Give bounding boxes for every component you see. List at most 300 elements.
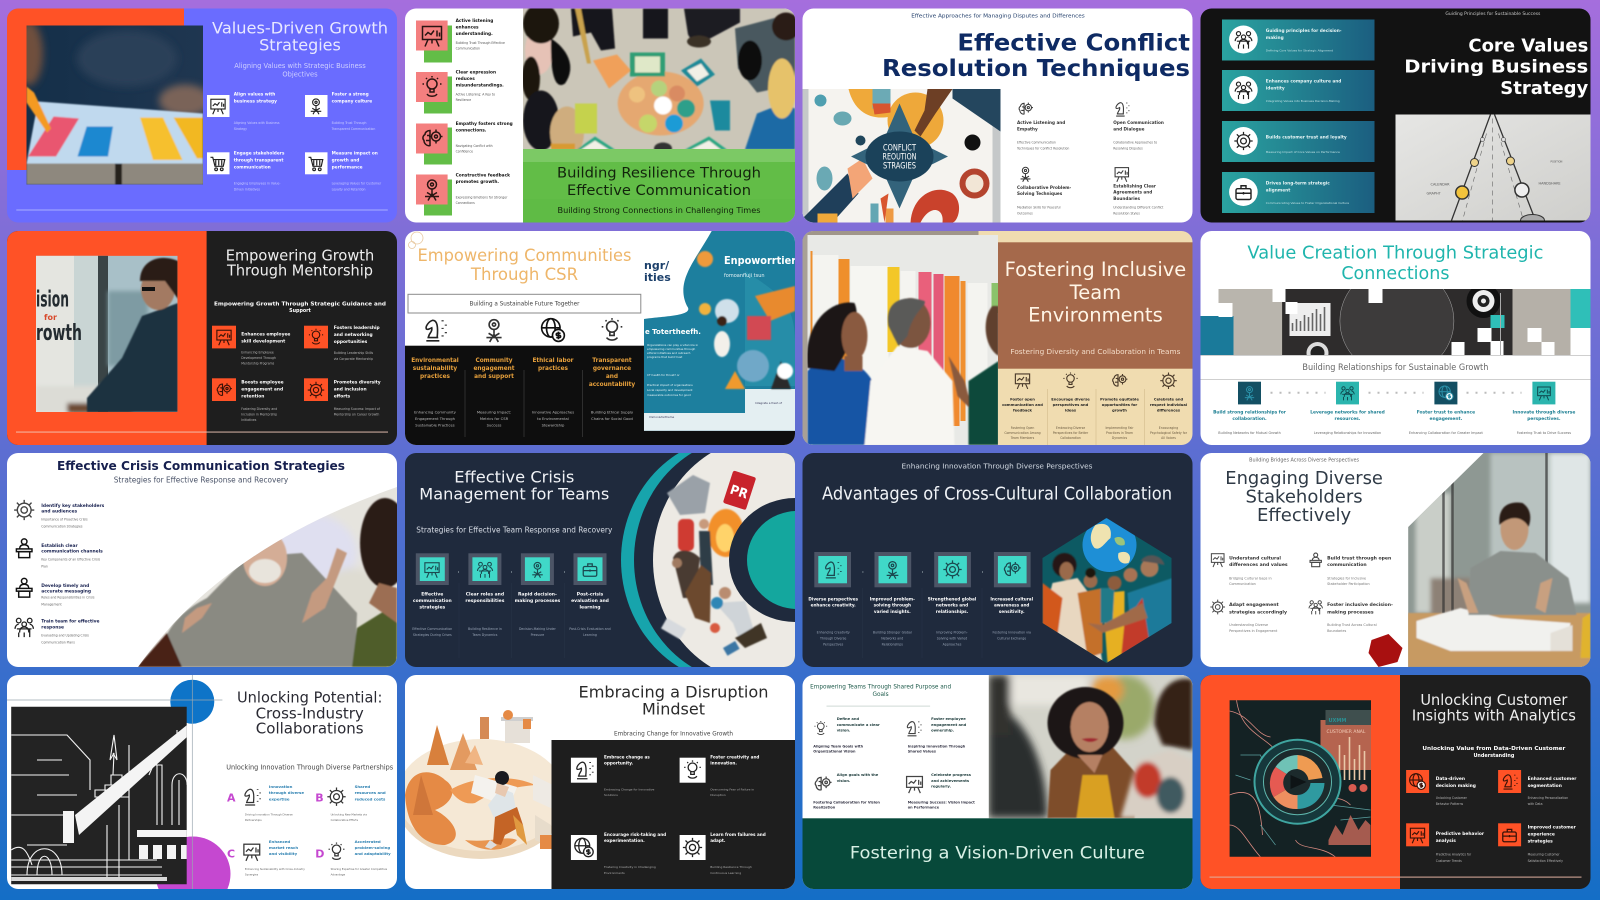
title: Through Mentorship <box>226 262 373 280</box>
column: community: and support <box>474 374 514 380</box>
column: individual differences: Encouraging <box>1159 426 1178 430</box>
column: open communication: feedback <box>1013 408 1033 412</box>
column: community: engagement <box>473 366 515 372</box>
item: foster culture: Transparent Communication <box>331 127 375 131</box>
item D: Accelerated <box>355 839 381 844</box>
column: ethical labor <box>532 358 574 428</box>
poster lettering <box>644 259 671 284</box>
column: open communication <box>1002 374 1043 440</box>
item: clear expression: Active Listening: A Key to <box>456 92 495 96</box>
panel: Effective Crisis Management for Teams <box>405 437 881 683</box>
column: ethical labor: Ethical labor <box>532 358 574 364</box>
title: Driving Business <box>1404 56 1588 78</box>
item: active listening <box>416 18 505 62</box>
item: strong relationships: Build strong relationships for <box>1213 409 1287 415</box>
item: celebrate progress: and achievements <box>931 779 970 783</box>
item: embrace change <box>571 754 654 797</box>
item: messaging: Management <box>41 603 62 607</box>
item: collaborative problem solving: Mediation Skills for Peaceful <box>1017 206 1061 210</box>
title <box>1225 468 1383 526</box>
item: align values: Strategy <box>234 127 247 131</box>
image band <box>1200 289 1590 355</box>
item: diversity: Promotes diversity <box>334 380 381 386</box>
title: Through CSR <box>470 265 578 284</box>
card: company culture: Enhances company culture and <box>1266 79 1341 85</box>
column: environmental: sustainability <box>413 366 457 372</box>
title: Cross-Industry <box>256 704 364 722</box>
item: train team: Communication Plans <box>41 640 75 644</box>
panel: Unlocking Customer Insights with Analytics <box>1200 675 1590 889</box>
illustration caption: CONFLICT <box>883 144 916 154</box>
illustration caption: REOUTION <box>882 152 916 162</box>
poster image: fomoanfluji tsun <box>724 273 765 279</box>
column: individual differences: Celebrate and <box>1154 398 1183 402</box>
item: clear expression <box>416 70 504 114</box>
item: build trust: Build trust through open <box>1327 555 1391 561</box>
item A: A <box>227 792 236 805</box>
connector dots <box>1270 392 1522 394</box>
road labels: HANDSHAKE <box>1538 182 1561 186</box>
item: open communication: Collaborative Approaches to <box>1113 140 1157 144</box>
column: governance: Transparent <box>592 358 632 364</box>
item: adapt strategies <box>1210 600 1287 633</box>
item D: problem-solving <box>355 845 390 850</box>
green title band <box>523 149 795 223</box>
item: empathy: Empathy fosters strong <box>456 121 513 127</box>
poster image: empowering communities through <box>647 347 695 351</box>
item: align values: business strategy <box>234 98 277 104</box>
item B <box>315 784 386 822</box>
title: Insights with Analytics <box>1412 706 1576 724</box>
poster lettering: ities <box>644 271 671 284</box>
title: Unlocking Customer <box>1420 691 1568 709</box>
column: individual differences <box>1150 372 1188 440</box>
item: celebrate progress: Celebrate progress <box>931 773 972 777</box>
item: problem solving: Building Stronger Global <box>873 630 912 634</box>
item: clear agreements: Establishing Clear <box>1113 184 1157 188</box>
item: cultural awareness: Fostering Innovation via <box>992 630 1031 634</box>
title: Advantages of Cross-Cultural Collaboration <box>822 484 1172 504</box>
card: guiding principles: Guiding principles for decision- <box>1266 28 1342 34</box>
item: inclusive decisions <box>1309 601 1393 633</box>
column: governance: and <box>606 374 618 380</box>
item: segmentation <box>1498 770 1577 806</box>
item: channels: Establish clear <box>41 543 78 549</box>
title <box>226 249 373 278</box>
item: communicate vision: Organizational Vision <box>813 750 856 754</box>
item: channels: Plan <box>41 565 48 569</box>
column: diverse perspectives: Perspectives for Better <box>1053 431 1089 435</box>
title band <box>802 818 1192 889</box>
item: diversity: Mentorship on Career Growth <box>334 412 379 416</box>
item: engage stakeholders: Engaging Employees in Value- <box>234 181 281 185</box>
item: clear expression: Clear expression <box>456 70 496 76</box>
column: diverse perspectives: Collaboration <box>1060 436 1081 440</box>
item: innovate: perspectives. <box>1527 416 1561 422</box>
item C: C <box>227 847 235 860</box>
item C: and visibility <box>269 851 298 856</box>
item: measure impact: Loyalty and Retention <box>332 187 366 191</box>
item: segmentation: segmentation <box>1528 783 1562 789</box>
poster image <box>644 231 795 431</box>
item: clear agreements: Resolution Styles <box>1113 212 1140 216</box>
item: predictive: Customer Trends <box>1436 859 1462 863</box>
item: risk taking: experimentation. <box>604 838 645 843</box>
item: inclusive decisions: making processes <box>1327 609 1374 615</box>
illustration: analytics dial <box>1230 700 1371 857</box>
title <box>212 22 387 54</box>
card: company culture <box>1222 70 1374 111</box>
panel: Core Values Driving Business Strategy <box>1200 8 1590 222</box>
panel: Advantages of Cross-Cultural Collaboration <box>802 453 1192 668</box>
poster image: e Totertheefh. <box>645 328 701 336</box>
item: empathy: Confidence <box>456 150 473 154</box>
item: active listening: Active Listening and <box>1017 120 1065 125</box>
item: communication strategies: communication <box>413 598 452 604</box>
item A: Partnerships <box>245 818 262 822</box>
item: decision making: Decision-Making Under <box>519 627 557 631</box>
item: open communication: Open Communication <box>1113 120 1164 125</box>
item: foster trust: Foster trust to enhance <box>1417 409 1475 415</box>
column: governance: Chains for Social Good <box>591 417 633 421</box>
poster image: Practical impact of organisations <box>647 383 693 387</box>
item: align values: Align values with <box>234 92 275 98</box>
title <box>1404 36 1589 99</box>
item: segmentation: with Data <box>1528 802 1543 806</box>
item A: Innovation <box>269 784 293 789</box>
column: equitable opportunities: Dynamics <box>1112 436 1128 440</box>
subtitle <box>214 302 386 313</box>
item: cultural awareness: Increased cultural <box>990 596 1034 601</box>
illustration caption: STRAGIES <box>883 162 916 172</box>
item: embrace change: Embrace change as <box>604 754 650 759</box>
column: open communication: Foster open <box>1010 398 1035 402</box>
column: equitable opportunities: Implementing Fair <box>1105 426 1134 430</box>
illustration: strategic road <box>1396 114 1590 220</box>
item: decision making <box>515 553 561 637</box>
item: foster creativity: innovation. <box>710 760 737 765</box>
item: skill development: Enhances employee <box>241 332 290 338</box>
item: leverage networks: Leveraging Relationships for Innovation <box>1314 431 1381 435</box>
item D: D <box>315 847 324 860</box>
title: Strategies <box>259 36 341 54</box>
item: empathy <box>416 121 513 164</box>
photo: colleagues at wall of notes <box>808 235 998 445</box>
item D: Sharing Expertise for Greater Competitive <box>331 867 388 871</box>
item: embrace change: Solutions <box>604 793 618 797</box>
item: risk taking: Encourage risk-taking and <box>604 832 666 837</box>
column: environmental: Engagement Through <box>415 417 456 421</box>
item: engage stakeholders: Driven Initiatives <box>234 187 260 191</box>
item: creativity: Enhancing Creativity <box>817 630 850 634</box>
item C: Enhanced <box>269 839 290 844</box>
item: feedback: promotes growth. <box>456 179 499 185</box>
item: communication strategies <box>412 553 452 637</box>
item: roles: responsibilities <box>465 598 505 604</box>
title: Management for Teams <box>419 484 609 503</box>
item: strong relationships: Building Networks for Mutual Growth <box>1218 431 1281 435</box>
item: innovate: Innovate through diverse <box>1512 409 1575 415</box>
subtitle: Guiding Principles for Sustainable Success <box>1445 11 1541 17</box>
item: problem solving <box>870 552 915 646</box>
window lettering: for <box>44 313 57 322</box>
subtitle: Strategies for Effective Response and Recovery <box>114 476 289 485</box>
item: communicate vision: vision. <box>837 729 851 733</box>
subtitle: Enhancing Innovation Through Diverse Perspectives <box>902 462 1093 471</box>
item: strong relationships <box>1213 382 1287 435</box>
column: diverse perspectives: ideas <box>1065 408 1077 412</box>
column: equitable opportunities: Promote equitable <box>1100 398 1139 402</box>
item A: expertise <box>269 796 290 801</box>
subtitle: Goals <box>872 692 889 698</box>
subtitle: Building Bridges Across Diverse Perspectives <box>1249 457 1360 463</box>
item: stakeholders: Identify key stakeholders <box>41 503 105 509</box>
item C: Synergies <box>245 872 259 876</box>
column: environmental: Environmental <box>411 358 459 364</box>
title: Effective Conflict <box>957 30 1190 56</box>
subtitle box <box>408 294 641 313</box>
item A: Driving Innovation Through Diverse <box>245 813 293 817</box>
item: predictive: Predictive Analytics for <box>1436 853 1472 857</box>
title <box>1247 243 1543 284</box>
dial label: UXMM <box>1328 718 1346 724</box>
item: foster trust: Enhancing Collaboration for Greater Impact <box>1409 431 1484 435</box>
item: predictive: Predictive behavior <box>1436 831 1485 837</box>
item: align goals: Fostering Collaboration for Vision <box>813 800 880 804</box>
item: train team: Evaluating and Updating Crisis <box>41 633 89 637</box>
item: engagement: Boosts employee <box>241 380 284 386</box>
item: train team: Train team for effective <box>41 619 99 625</box>
panel: Engaging Diverse Stakeholders Effectively <box>1200 453 1590 667</box>
card: long-term alignment <box>1222 172 1374 213</box>
item: open communication <box>1113 103 1164 150</box>
item A <box>227 784 304 822</box>
item: data-driven: Unlocking Customer <box>1436 796 1468 800</box>
item: channels <box>16 539 103 569</box>
item: engagement: Fostering Diversity and <box>241 407 277 411</box>
column: open communication: Team Members <box>1010 436 1035 440</box>
subtitle <box>234 62 366 78</box>
item: collaborative problem solving <box>1017 167 1072 216</box>
item: inclusive decisions: Building Trust Across Cultural <box>1327 623 1377 627</box>
item: decision making: making processes <box>515 598 561 604</box>
item: communicate vision: Define and <box>837 717 860 721</box>
item: active listening: Communication <box>456 46 480 50</box>
item: inclusive decisions: Boundaries <box>1327 629 1346 633</box>
item C: market reach <box>269 845 298 850</box>
item: learn from failure: Building Resilience Through <box>710 865 752 869</box>
item: train team <box>15 618 99 644</box>
item: engage stakeholders: through transparent <box>234 157 283 163</box>
title: Building Resilience Through <box>557 166 761 182</box>
column: ethical labor: practices <box>538 366 569 372</box>
item B: B <box>315 792 324 805</box>
title: Effectively <box>1257 505 1352 526</box>
item: innovate: Fostering Trust to Drive Success <box>1517 431 1571 435</box>
road labels: POSITION <box>1550 160 1563 164</box>
item: messaging: Develop timely and <box>41 583 89 589</box>
title: Strategy <box>1500 78 1589 99</box>
item: active listening: Building Trust Through Effective <box>456 41 505 45</box>
dark content panel <box>552 740 795 889</box>
item: employee engagement <box>907 717 967 754</box>
item: build trust <box>1310 553 1391 586</box>
subtitle box: Building a Sustainable Future Together <box>470 300 580 307</box>
title <box>558 166 760 195</box>
subtitle: Building Strong Connections in Challenging Times <box>558 206 761 215</box>
item: communication strategies: Effective Communication <box>412 627 452 631</box>
item: problem solving: Networks and <box>881 636 903 640</box>
item: align goals: vision. <box>837 779 851 783</box>
item: build trust: communication <box>1327 562 1367 568</box>
item: align values: Aligning Values with Business <box>234 121 280 125</box>
item: leadership: Fosters leadership <box>334 325 380 331</box>
item: diversity <box>304 378 381 416</box>
subtitle: Strategies for Effective Team Response and Recovery <box>416 526 613 535</box>
column: community: Success <box>487 424 502 428</box>
card: customer trust: Measuring Impact of Core Values on Performance <box>1266 150 1340 154</box>
item: communicate vision: Aligning Team Goals with <box>813 744 864 748</box>
item: leadership <box>304 325 380 361</box>
item: segmentation: Enhanced customer <box>1528 776 1577 782</box>
item: problem solving: varied insights. <box>874 609 911 614</box>
item: active listening: Techniques for Conflict Resolution <box>1016 146 1069 150</box>
panel: Embracing a Disruption Mindset <box>397 675 795 889</box>
item: skill development: Development Through <box>241 356 276 360</box>
item: stakeholders: Importance of Proactive Crisis <box>41 518 88 522</box>
column: environmental: Sustainable Practices <box>415 424 455 428</box>
item: data-driven: Data-driven <box>1436 776 1465 782</box>
poster image: Local capacity and development <box>647 388 693 392</box>
card: long-term alignment: alignment <box>1266 188 1290 194</box>
item: innovate <box>1512 382 1575 435</box>
poster image: Immoniufertheme <box>649 415 674 419</box>
item: train team: response <box>41 624 64 630</box>
road labels: GRAPH? <box>1426 192 1441 196</box>
item: cultural awareness: sensitivity. <box>999 609 1025 614</box>
item: stakeholders <box>14 500 105 529</box>
item: foster trust: engagement. <box>1430 416 1463 422</box>
subtitle: Building Relationships for Sustainable Growth <box>1302 363 1488 373</box>
item: predictive: analysis <box>1436 838 1456 844</box>
item: leadership: via Corporate Mentorship <box>334 357 373 361</box>
item: empathy: connections. <box>456 128 487 134</box>
item: celebrate progress <box>907 773 975 810</box>
road labels <box>1426 160 1563 196</box>
column: diverse perspectives: perspectives and <box>1053 403 1089 407</box>
item: risk taking: Fostering Creativity in Challenging <box>604 865 656 869</box>
window lettering: ision <box>36 288 69 313</box>
item: roles: Team Dynamics <box>471 633 498 637</box>
photo: speaker gesturing <box>7 453 410 667</box>
item: stakeholders: Communication Strategies <box>41 525 83 529</box>
item: employee engagement: engagement and <box>931 723 967 727</box>
decorative circles <box>7 675 230 900</box>
item: clear agreements: Agreements and <box>1113 190 1152 194</box>
item: align goals: Align goals with the <box>837 773 879 777</box>
item C <box>227 839 305 876</box>
title band: Fostering a Vision-Driven Culture <box>850 843 1145 863</box>
item: collaborative problem solving: Collaborative Problem- <box>1017 185 1072 190</box>
item: foster creativity <box>680 754 759 797</box>
item: align goals <box>813 773 880 810</box>
title: Value Creation Through Strategic <box>1247 243 1543 263</box>
item: global networks <box>928 552 977 646</box>
title: Effective Crisis <box>454 467 574 486</box>
photo: man at table <box>1400 453 1590 667</box>
item: build trust: Stakeholder Participation <box>1327 582 1370 586</box>
column: individual differences: differences <box>1157 408 1181 412</box>
item: clear expression: reduces <box>456 76 475 82</box>
item: problem solving: solving through <box>874 603 911 608</box>
item: foster culture: Foster a strong <box>332 92 369 98</box>
item: active listening: Empathy <box>1017 126 1038 132</box>
card: company culture: Integrating Values into Business Decision-Making <box>1266 99 1340 103</box>
item: communication strategies: strategies <box>419 605 446 611</box>
card: guiding principles: Defining Core Values for Strategic Alignment <box>1266 48 1334 52</box>
item: leadership: and networking <box>334 332 373 338</box>
subtitle <box>1422 746 1566 759</box>
item: diversity: efforts <box>334 394 351 400</box>
item: decision making: Pressure <box>531 633 544 637</box>
item: measure impact: growth and <box>332 157 359 163</box>
column: governance <box>589 358 635 421</box>
item: engage stakeholders: Engage stakeholders <box>234 150 285 156</box>
subtitle: Support <box>289 308 312 314</box>
item B: reduced costs <box>355 796 386 801</box>
poster image: CT health for thrust? or <box>647 373 680 377</box>
column: diverse perspectives: Encourage diverse <box>1051 398 1090 402</box>
item: channels: communication channels <box>41 549 103 555</box>
item: customer experience: Measuring Customer <box>1528 853 1560 857</box>
card: company culture: identity <box>1266 86 1285 92</box>
item: skill development: Enhancing Employee <box>241 350 274 354</box>
subtitle: Unlocking Value from Data-Driven Customer <box>1422 746 1566 752</box>
item: embrace change: Embracing Change for Innovative <box>604 787 654 791</box>
column: individual differences: respect individual <box>1150 403 1187 407</box>
photo: woman in team discussion <box>988 675 1192 818</box>
item: foster trust <box>1409 382 1484 435</box>
title: Unlocking Potential: <box>237 689 382 707</box>
column: environmental <box>411 358 459 428</box>
item: creativity: enhance creativity. <box>811 603 856 608</box>
title <box>237 689 382 738</box>
item: creativity: Perspectives <box>823 642 844 646</box>
item: feedback: Constructive feedback <box>456 172 510 178</box>
title: Connections <box>1341 264 1449 284</box>
window lettering <box>37 290 81 340</box>
panel: Fostering a Vision-Driven Culture <box>802 675 1192 889</box>
item: predictive <box>1406 823 1485 863</box>
column: governance: accountability <box>589 382 635 388</box>
subtitle: Objectives <box>282 70 318 78</box>
item: active listening: Effective Communication <box>1017 140 1056 144</box>
title <box>882 30 1190 82</box>
item: creativity: Through Diverse <box>819 636 846 640</box>
title panel <box>998 242 1192 369</box>
column: ethical labor: Innovative Approaches <box>532 411 574 415</box>
item: cultural differences: Understand cultural <box>1229 555 1281 561</box>
panel: Empowering Growth Through Mentorship <box>7 231 397 445</box>
panel: Fostering Inclusive Team Environments <box>802 231 1192 445</box>
item: customer experience: experience <box>1528 832 1555 838</box>
item: post-crisis: Learning <box>583 633 597 637</box>
item: foster culture: Building Trust Through <box>332 121 366 125</box>
column: open communication: communication and <box>1002 403 1043 407</box>
item B: Unlocking New Markets via <box>331 813 367 817</box>
title: Collaborations <box>256 720 364 738</box>
title: Effective Communication <box>567 183 751 199</box>
